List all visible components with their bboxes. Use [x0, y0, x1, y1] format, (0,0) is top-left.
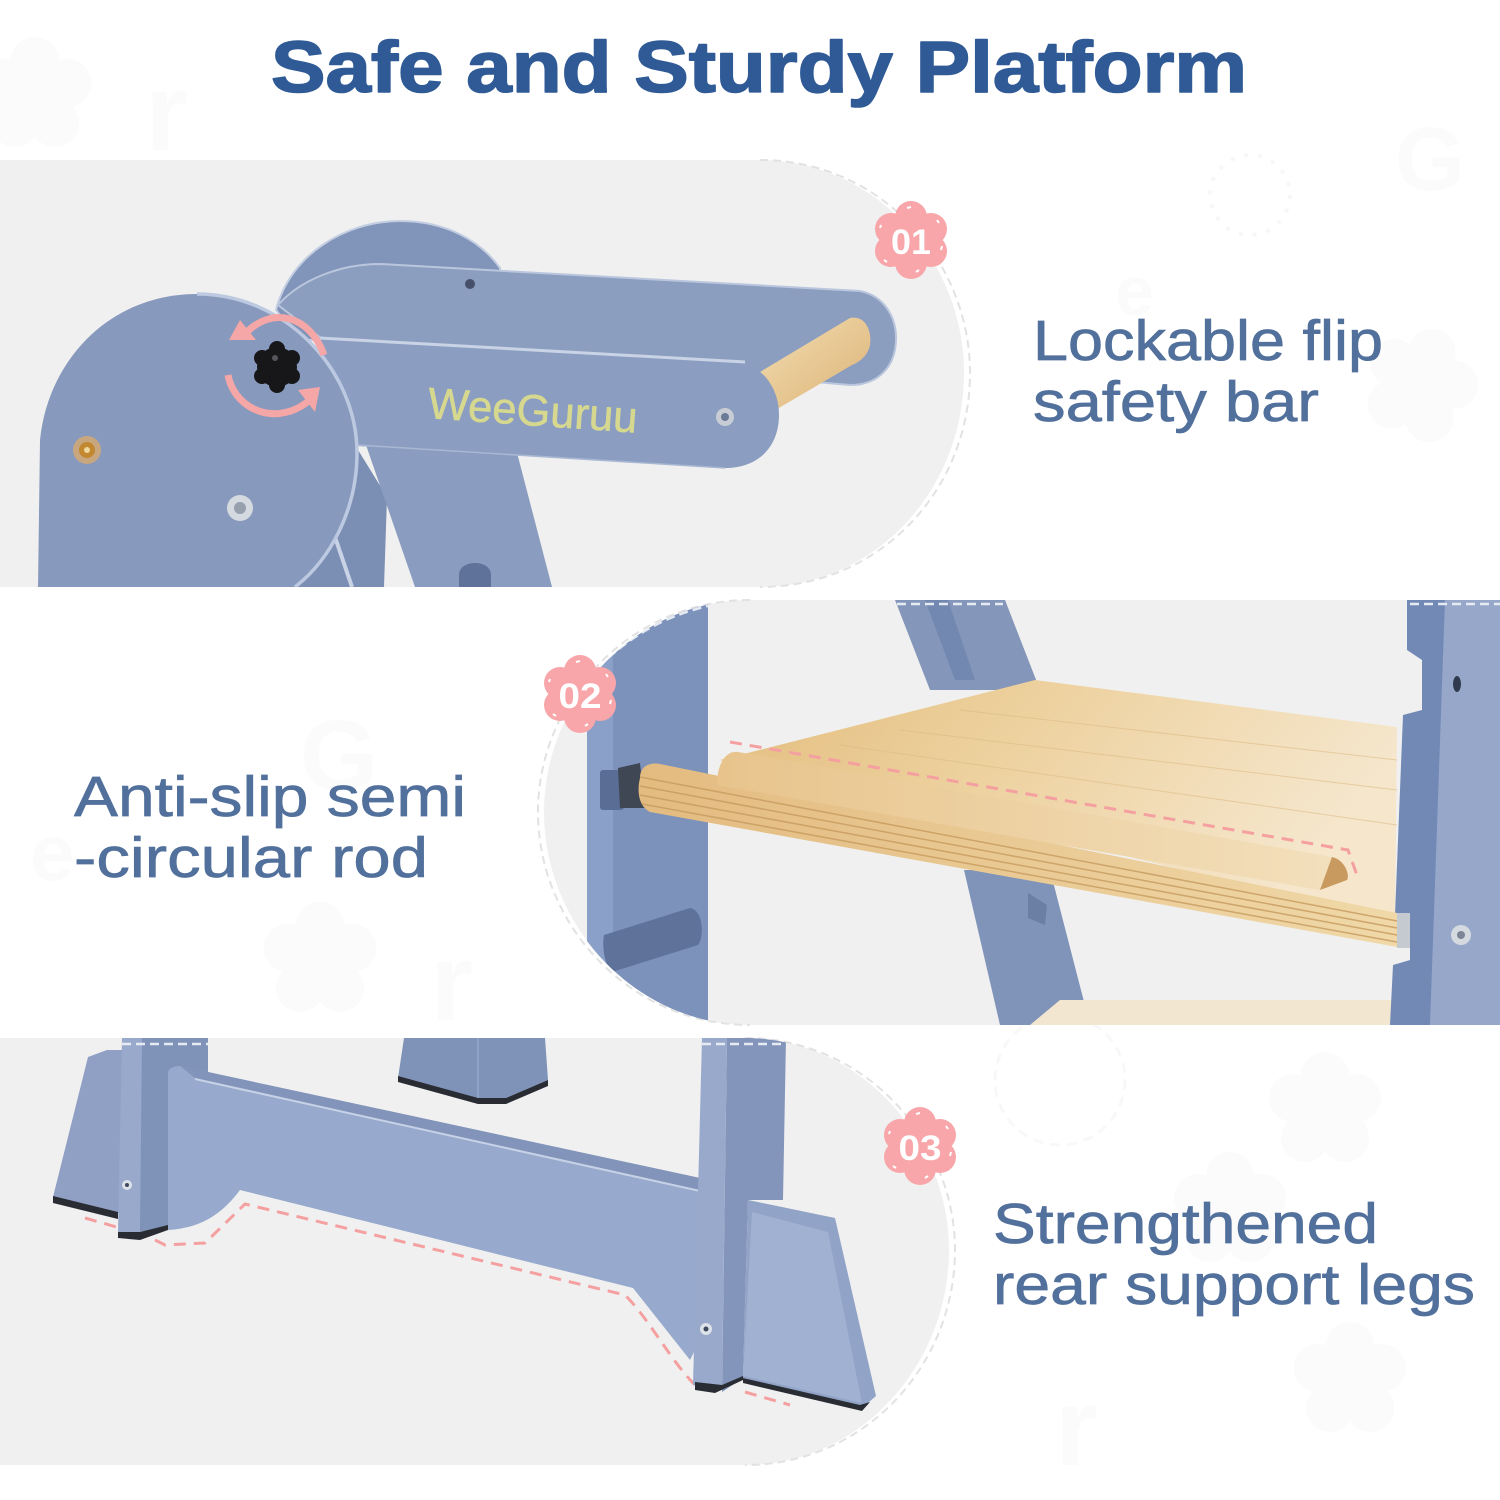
background pattern: r: [430, 921, 473, 1044]
icon: rotation arrows: [228, 318, 324, 414]
caption 02: Anti-slip semi: [74, 765, 466, 829]
icon: front leg: [366, 445, 552, 587]
background pattern: e: [30, 808, 74, 897]
background pattern: G: [1395, 110, 1465, 210]
icon: front disc with leg: [38, 294, 357, 587]
panel: rear support legs: [0, 1038, 955, 1465]
icon: knob: [254, 341, 300, 393]
background pattern: G: [300, 700, 378, 812]
background pattern: e: [1115, 252, 1154, 330]
badge 02: [544, 655, 616, 733]
icon: left post: [118, 1038, 208, 1240]
white dashes: [122, 1043, 786, 1045]
icon: front bar: [320, 338, 779, 468]
dashed highlight: [730, 742, 1358, 878]
icon: left post: [587, 600, 708, 1022]
caption 01 line 2: safety bar: [1033, 370, 1319, 434]
icon: right post: [1390, 600, 1500, 1025]
icon: right post: [693, 1038, 786, 1393]
icon: wooden rod: [755, 318, 870, 412]
badge 03: 03: [898, 1129, 942, 1168]
icon: far foot: [398, 1038, 548, 1104]
caption 03 line 2: rear support legs: [993, 1253, 1475, 1317]
icon: left foot: [53, 1050, 122, 1219]
icon: right foot: [743, 1200, 876, 1411]
badge 03: [884, 1107, 956, 1185]
icon: platform: [720, 680, 1397, 920]
caption 02 line 2: -circular rod: [74, 826, 428, 890]
icon: rear cross beam: [168, 1066, 700, 1360]
brand text: WeeGuruu: [426, 379, 639, 443]
caption 01: Lockable flip: [1033, 309, 1383, 373]
badge 02: 02: [558, 677, 602, 716]
icon: semi-circular rod: [639, 752, 1397, 947]
icon: rear disc: [276, 221, 500, 340]
dashed highlight: [85, 1204, 790, 1405]
title: Safe and Sturdy Platform: [271, 28, 1247, 108]
background pattern: r: [145, 51, 188, 174]
badge 01: 01: [891, 223, 931, 262]
background pattern: r: [1055, 1366, 1098, 1489]
icon: back post: [895, 600, 1040, 690]
panel: semi-circular rod: [538, 600, 1500, 1025]
panel: flip safety bar: [0, 160, 970, 587]
icon: back leg piece: [298, 450, 387, 587]
icon: screws: [73, 279, 734, 587]
icon: upper bar: [278, 264, 896, 385]
caption 03: Strengthened: [993, 1192, 1378, 1256]
badge 01: [875, 201, 947, 279]
